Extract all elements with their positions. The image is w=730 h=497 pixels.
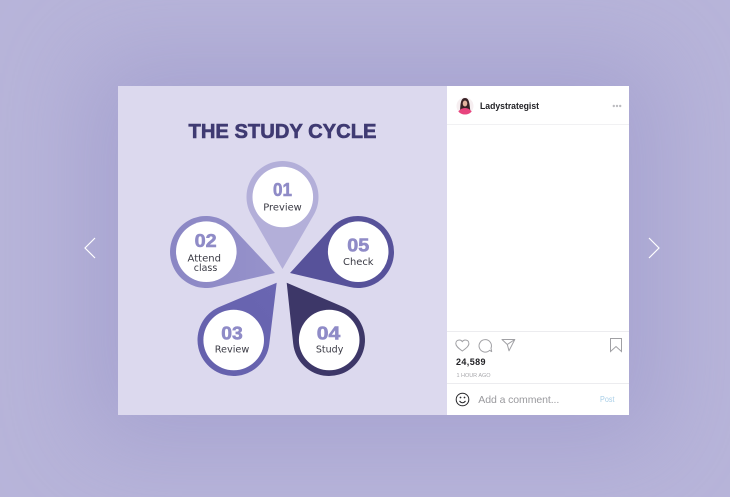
icon: heart — [456, 340, 469, 351]
step 01: Preview: 01 — [273, 179, 292, 200]
step 03: Review — [198, 283, 277, 376]
icon: comment bubble — [479, 340, 492, 352]
arrow: next — [649, 238, 659, 258]
step 04: Study: Study — [316, 344, 343, 355]
username: Ladystrategist — [480, 101, 539, 111]
step 05: Check: 05 — [347, 234, 369, 256]
step 02: Attend class — [170, 216, 275, 288]
step 03: Review: 03 — [221, 322, 243, 344]
panel: infographic — [118, 86, 447, 415]
post button: Post — [600, 395, 615, 404]
step 01: Preview: Preview — [263, 202, 302, 214]
timestamp: 1 HOUR AGO — [456, 373, 491, 379]
icon: more dots — [613, 105, 621, 107]
card shadow — [118, 86, 629, 415]
icon: smiley — [456, 393, 469, 406]
step 05: Check: Check — [343, 257, 374, 268]
step 02: Attend class: 02 — [195, 230, 217, 251]
step 04: Study — [287, 283, 365, 376]
title: THE STUDY CYCLE — [188, 121, 376, 143]
step 02: Attend class: Attend — [188, 254, 221, 265]
arrow: previous — [85, 238, 95, 258]
step 03: Review: Review — [215, 344, 249, 355]
step 05: Check — [290, 216, 394, 288]
step 01: Preview — [246, 161, 318, 269]
icon: avatar — [456, 98, 474, 114]
panel: social post — [447, 86, 629, 415]
icon: share — [502, 340, 515, 351]
step 02: Attend class: class — [194, 263, 217, 274]
comment placeholder: Add a comment... — [478, 394, 559, 406]
icon: bookmark — [610, 338, 622, 352]
step 04: Study: 04 — [317, 322, 341, 344]
like count: 24,589 — [456, 357, 486, 367]
